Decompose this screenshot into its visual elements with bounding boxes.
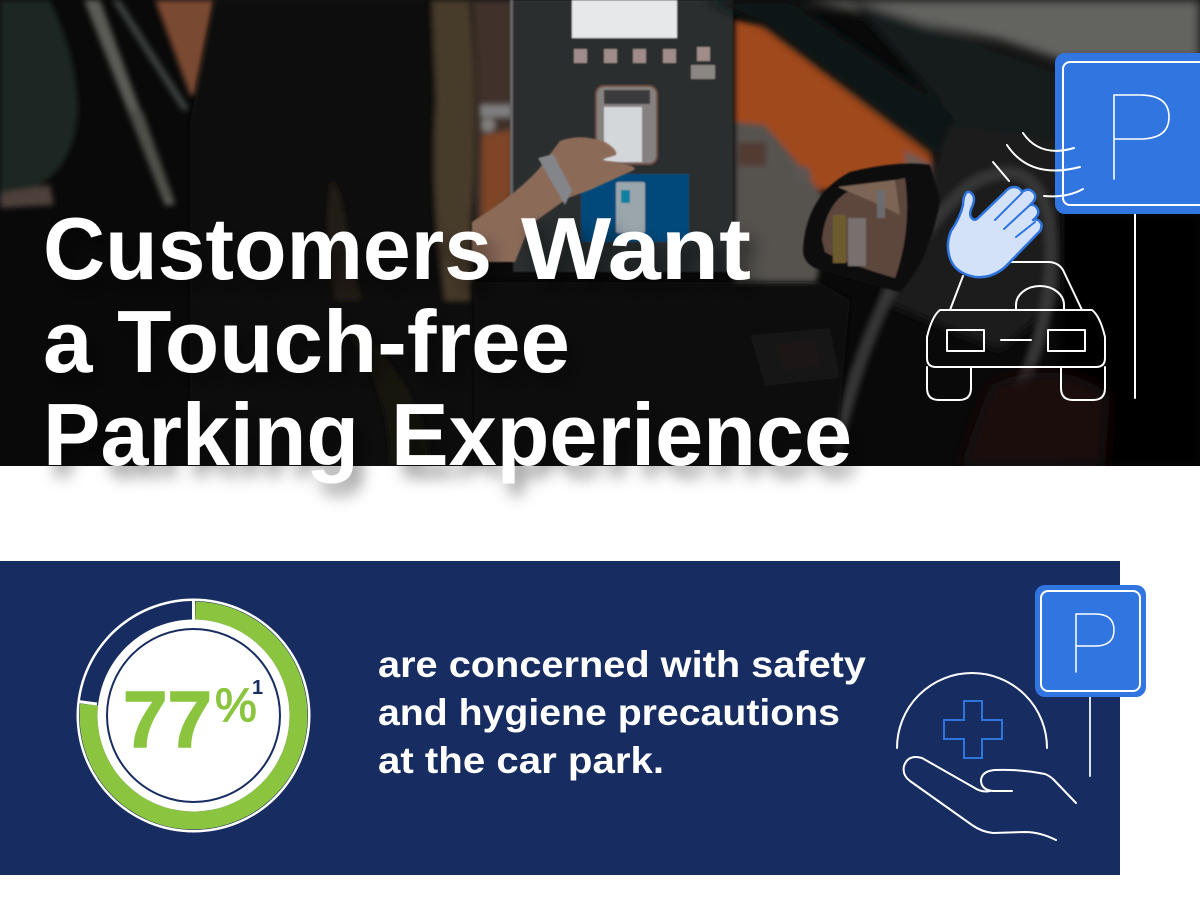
title: [43, 199, 852, 484]
value: 77: [123, 675, 212, 764]
hair: [192, 0, 481, 305]
panel: safety statistic: [0, 561, 1120, 875]
parking sign: [1055, 53, 1200, 214]
statistic description: at the car park.: [378, 739, 664, 781]
inner navy ring: [107, 629, 280, 802]
small sign post: [1089, 697, 1091, 776]
donut chart: 77 percent: [76, 598, 310, 832]
driver hand at wheel: [960, 372, 1110, 466]
icon: waving hand: [948, 187, 1042, 277]
car: [927, 262, 1105, 400]
seat and door pillar, left: [0, 0, 190, 208]
percent sign: %: [215, 678, 257, 731]
statistic description: [378, 643, 866, 781]
title line 3: Parking: [43, 385, 359, 484]
background: orange wall and parked car behind window: [155, 0, 938, 290]
dome: [897, 673, 1047, 748]
statistic description: and hygiene precautions: [378, 691, 840, 733]
sensor waves: [993, 133, 1083, 196]
car door window frame: [705, 0, 1200, 466]
steering wheel: [835, 173, 1051, 450]
title line 1: Customers: [43, 199, 492, 298]
title line 3: Experience: [391, 385, 852, 484]
side mirror: [803, 164, 940, 292]
small parking sign: [1035, 585, 1146, 697]
open hand: [904, 757, 1076, 840]
segment separators: [78, 601, 194, 704]
inner white disc: [98, 620, 290, 812]
hero photo: driver reaching to parking kiosk: [0, 0, 1200, 466]
medical cross: [944, 701, 1002, 758]
arm and hand: [472, 137, 635, 262]
statistic description: are concerned with safety: [378, 643, 866, 685]
footnote marker: 1: [252, 677, 263, 699]
dashboard and door panel: [345, 282, 850, 466]
icon: hand holding medical cross with parking sign: [897, 585, 1146, 840]
parking kiosk: [510, 0, 733, 272]
parking sign post: [1134, 214, 1136, 398]
icon: car waving at parking sign: [927, 53, 1200, 400]
title line 2: a Touch-free: [43, 292, 570, 391]
green arc 77%: [89, 611, 299, 821]
title line 1: Want: [521, 199, 751, 298]
